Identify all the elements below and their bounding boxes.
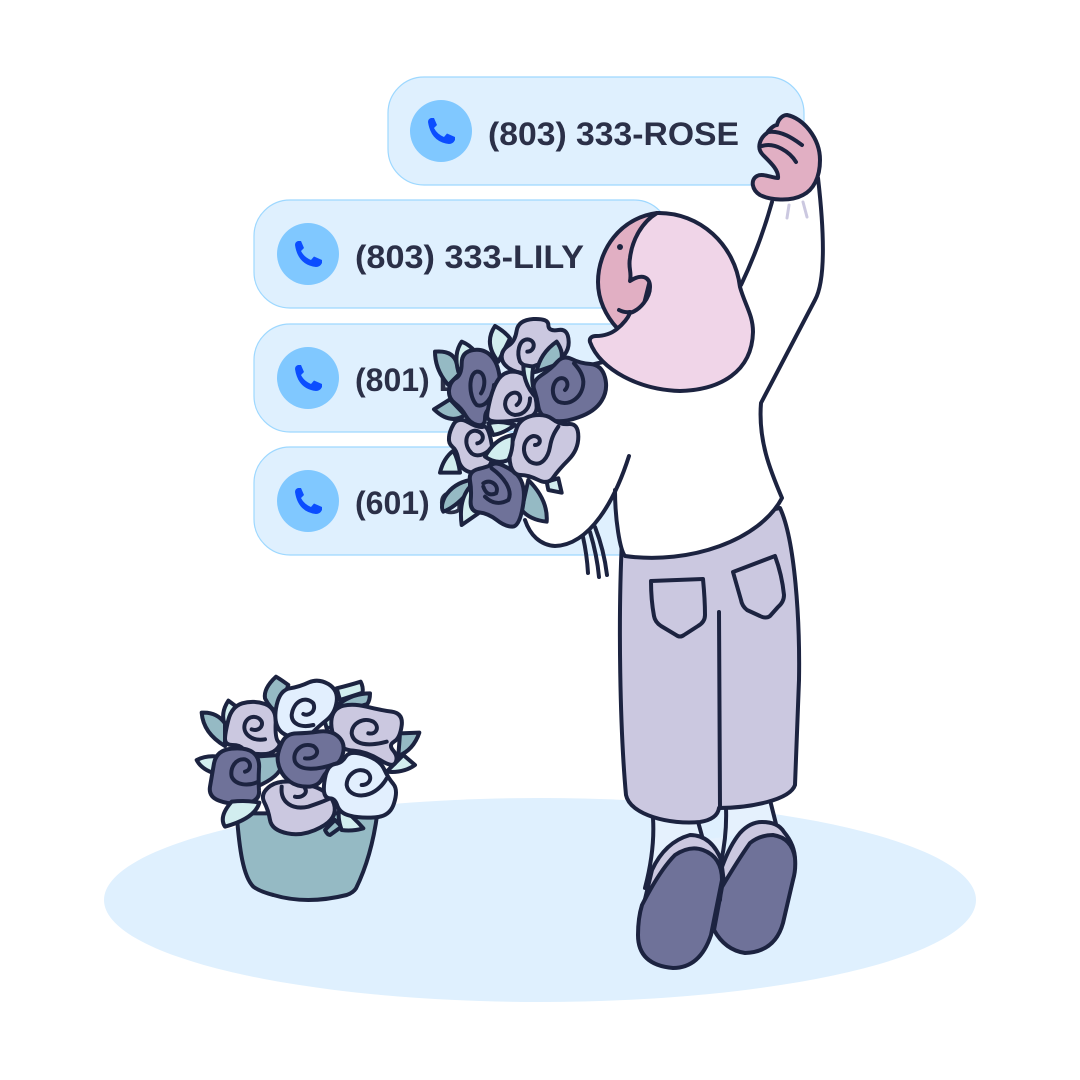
phone card: third <box>254 324 670 432</box>
trousers <box>620 508 799 823</box>
phone card: rose: (803) 333-ROSE <box>488 116 739 152</box>
socks <box>645 795 778 890</box>
flower pot bouquet <box>197 677 419 900</box>
head <box>590 213 753 391</box>
back pockets <box>651 579 705 636</box>
phone card: fourth <box>254 447 670 555</box>
eye <box>617 244 623 250</box>
phone card: lily: (803) 333-LILY <box>355 239 584 275</box>
wrist marks <box>787 202 807 218</box>
stems <box>583 527 607 577</box>
phone card: rose <box>388 77 804 185</box>
hand <box>753 115 820 200</box>
phone card: third: (801) L <box>355 362 458 398</box>
ground ellipse <box>104 798 976 1002</box>
phone card: lily <box>254 200 670 308</box>
torso and arms <box>520 178 823 558</box>
held bouquet <box>434 319 606 527</box>
phone card: fourth: (601) G <box>355 485 463 521</box>
left shoe <box>638 835 722 968</box>
person <box>520 115 823 968</box>
right shoe <box>714 822 795 953</box>
